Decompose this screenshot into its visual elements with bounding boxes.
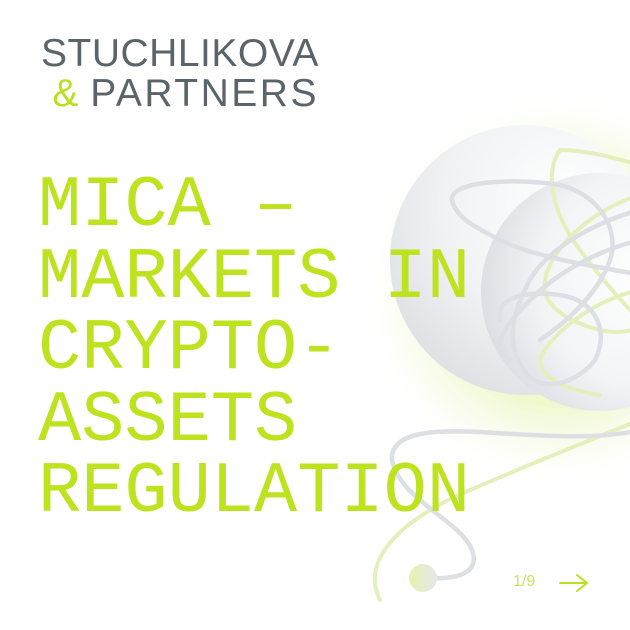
- logo: [41, 32, 319, 115]
- title: MARKETS IN: [38, 236, 470, 318]
- lime strings: [375, 150, 630, 600]
- title: CRYPTO-: [38, 308, 340, 390]
- title: [38, 165, 470, 533]
- page number: 1/9: [513, 573, 535, 590]
- bead: [409, 564, 437, 592]
- title: ASSETS: [38, 380, 297, 462]
- gray strings: [392, 181, 630, 578]
- glow: [370, 100, 630, 480]
- title: REGULATION: [38, 451, 470, 533]
- arrow: [560, 575, 587, 591]
- logo: STUCHLIKOVA: [41, 32, 319, 75]
- title: MICA –: [38, 165, 297, 247]
- sphere back: [390, 125, 630, 395]
- logo: & PARTNERS: [52, 72, 319, 115]
- sphere front: [481, 173, 630, 411]
